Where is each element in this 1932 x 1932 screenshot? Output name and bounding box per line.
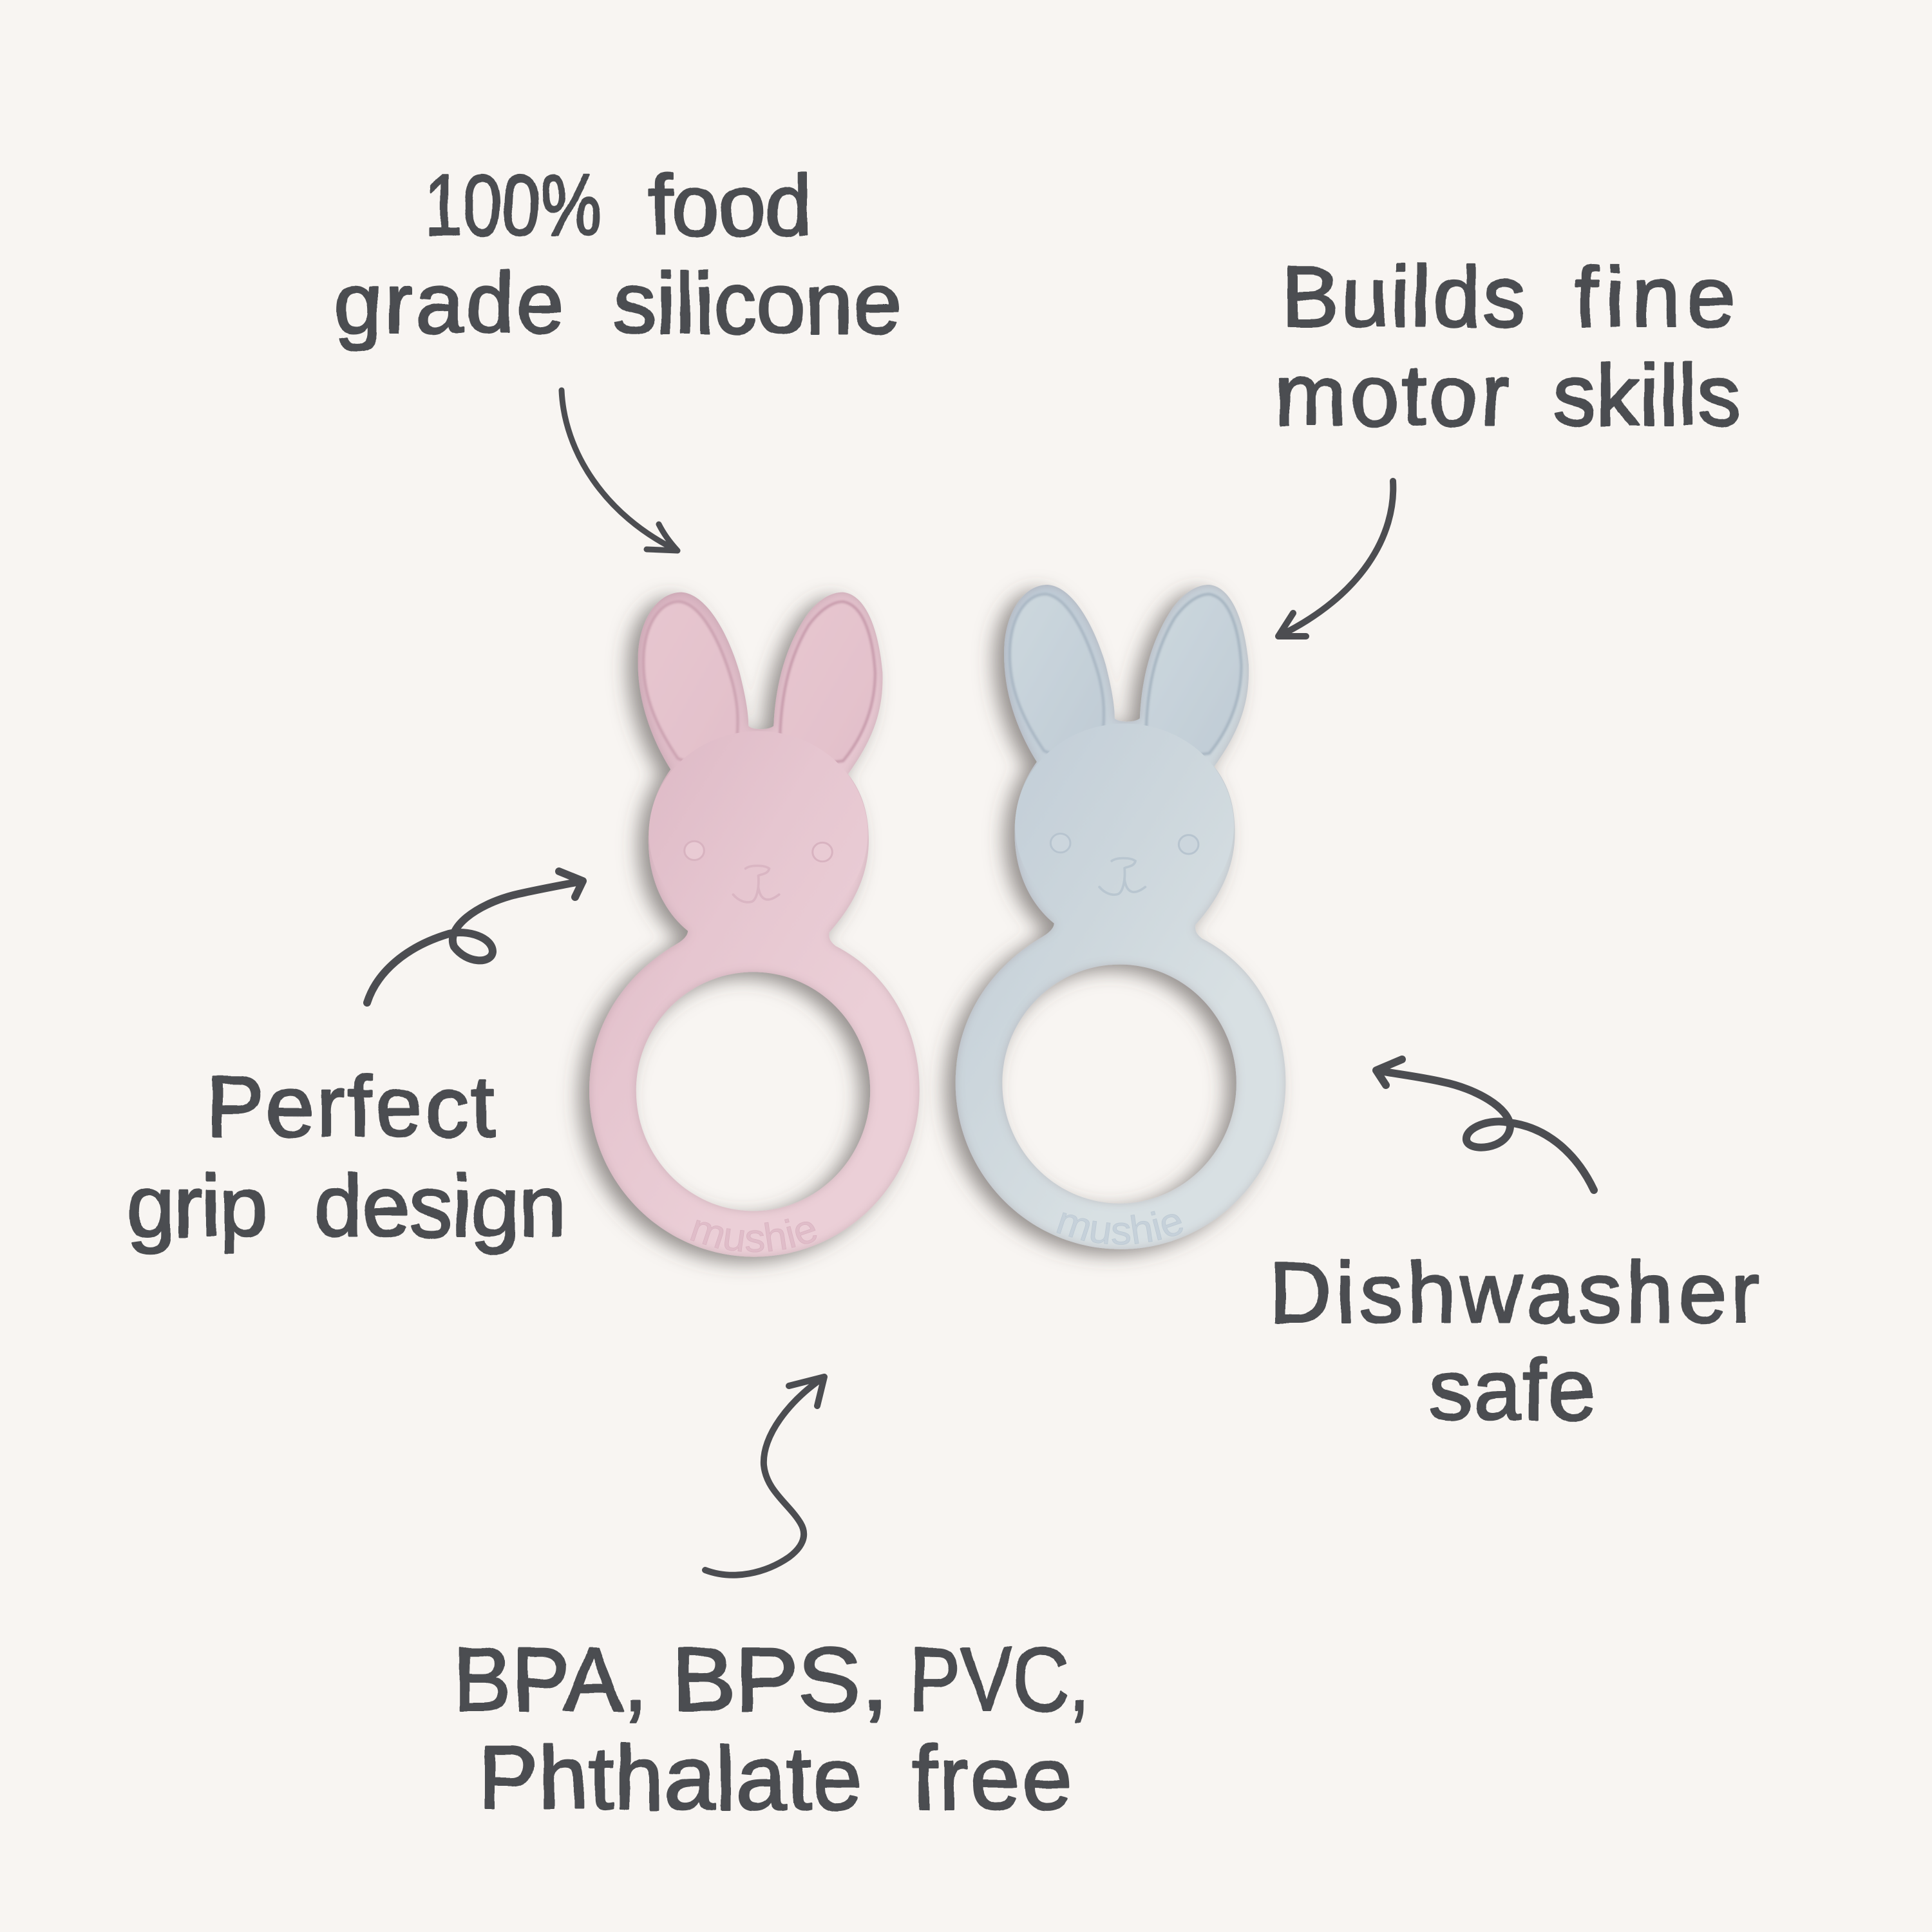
blue right ear inner — [1146, 594, 1242, 757]
arrow: dishwasher safe to blue ring — [1376, 1059, 1594, 1190]
label: 100% food grade silicone — [334, 158, 901, 352]
label: Builds fine motor skills: Builds — [1282, 249, 1526, 345]
blue head — [1015, 724, 1234, 927]
pink eyes — [685, 841, 832, 862]
arrow: food grade silicone to pink ear — [562, 390, 677, 551]
arrow: grip design to pink head — [367, 871, 583, 1003]
label: BPA, BPS, PVC, Phthalate free: BPA, — [453, 1629, 647, 1730]
label: Perfect grip design: grip — [127, 1159, 267, 1255]
label: BPA, BPS, PVC, Phthalate free: free — [912, 1727, 1072, 1828]
pink teether silhouette — [589, 592, 920, 1257]
arrow: fine motor skills to blue ear — [1278, 481, 1393, 636]
blue rabbit teether — [933, 580, 1289, 1267]
label: 100% food grade silicone: silicone — [613, 256, 901, 352]
pink right ear inner — [780, 601, 875, 764]
label: Builds fine motor skills: skills — [1553, 348, 1741, 444]
label: BPA, BPS, PVC, Phthalate free — [453, 1629, 1090, 1828]
pink head — [649, 731, 867, 935]
label: 100% food grade silicone: food — [649, 158, 813, 254]
label: Dishwasher safe: Dishwasher — [1269, 1245, 1759, 1341]
label: Builds fine motor skills: motor — [1275, 348, 1510, 444]
pink nose and mouth — [734, 866, 779, 902]
label: BPA, BPS, PVC, Phthalate free: PVC, — [909, 1629, 1090, 1730]
pink mushie logo: mushie — [690, 1218, 817, 1252]
label: BPA, BPS, PVC, Phthalate free: Phthalate — [478, 1727, 862, 1828]
label: Dishwasher safe — [1269, 1245, 1759, 1438]
label: Dishwasher safe: safe — [1429, 1342, 1596, 1438]
label: Perfect grip design: Perfect — [206, 1059, 495, 1155]
pink left ear inner — [643, 601, 737, 764]
blue nose and mouth — [1099, 858, 1145, 895]
blue teether silhouette — [956, 585, 1285, 1249]
blue mushie logo: mushie — [1056, 1211, 1183, 1245]
label: 100% food grade silicone: grade — [334, 256, 564, 352]
label: Perfect grip design: design — [314, 1159, 567, 1255]
arrow: BPA free to pink ring — [705, 1377, 824, 1575]
label: BPA, BPS, PVC, Phthalate free: BPS, — [672, 1629, 887, 1730]
label: Builds fine motor skills — [1275, 249, 1741, 444]
blue eyes — [1050, 833, 1198, 854]
label: Builds fine motor skills: fine — [1575, 249, 1735, 345]
pink rabbit teether — [567, 587, 922, 1275]
blue left ear inner — [1010, 594, 1104, 757]
label: Perfect grip design — [127, 1059, 567, 1255]
label: 100% food grade silicone: 100% — [424, 158, 601, 254]
